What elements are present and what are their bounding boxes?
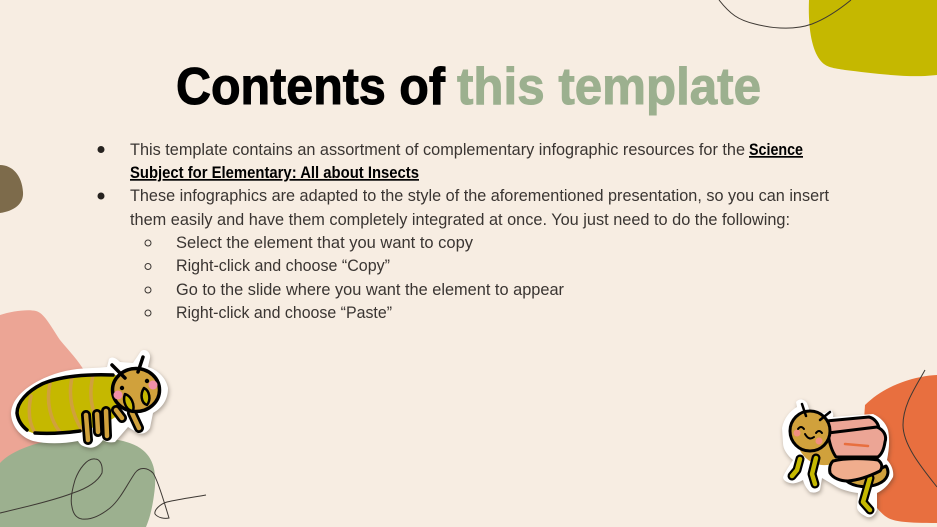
bullet 2: them easily and have them completely integrated at once. You just need to do the following: [130, 210, 790, 229]
thorax [798, 440, 838, 465]
wing: lower [830, 459, 882, 481]
body stripes [29, 376, 94, 432]
sub-bullets: Right-click and choose “Paste” [176, 303, 392, 322]
blob: green lower left [0, 437, 155, 527]
title: Contents of [176, 58, 446, 116]
sticker: beetle larva lower left [11, 350, 168, 448]
cheeks [114, 390, 122, 400]
eyes [120, 386, 124, 390]
head [790, 411, 830, 451]
antennae [112, 357, 143, 378]
blob: olive top right [809, 0, 937, 76]
bullet 2 [98, 186, 829, 229]
cheeks [794, 430, 800, 436]
sticker white outline [11, 350, 168, 448]
mandibles [124, 394, 134, 411]
body [17, 375, 118, 433]
blob: orange lower right [860, 375, 937, 523]
front legs [792, 458, 816, 484]
blob: pink lower left [0, 310, 90, 465]
sticker white outline [782, 399, 893, 517]
wing: middle [828, 427, 886, 457]
bullet 1: Science [749, 140, 803, 159]
head [112, 368, 160, 412]
abdomen [845, 466, 888, 487]
antennae [802, 404, 830, 420]
body outline [17, 375, 113, 433]
blob: brown left edge [0, 165, 23, 213]
wing stripe [845, 444, 868, 446]
bullet 1: Subject for Elementary: All about Insects [130, 163, 419, 182]
squiggle: lower left line [0, 459, 206, 519]
sub-bullets: Right-click and choose “Copy” [176, 256, 390, 275]
squiggle: lower right line [903, 370, 937, 487]
title [176, 58, 761, 116]
title: this template [457, 58, 761, 116]
face [798, 427, 822, 438]
wing: top [826, 417, 879, 434]
bullet list [98, 140, 829, 322]
sub-bullets: Go to the slide where you want the element to appear [176, 280, 564, 299]
back leg [863, 478, 870, 510]
bullet 1: This template contains an assortment of complementary infographic resources for the [130, 140, 745, 159]
bullet 2: These infographics are adapted to the style of the aforementioned presentation, so you can insert [130, 186, 829, 205]
bullet 1 [98, 140, 803, 182]
legs [86, 410, 139, 440]
sub-bullets [145, 233, 564, 322]
sub-bullets: Select the element that you want to copy [176, 233, 473, 252]
squiggle: top right line [719, 0, 851, 28]
sticker: smiling cricket lower right [782, 399, 893, 517]
